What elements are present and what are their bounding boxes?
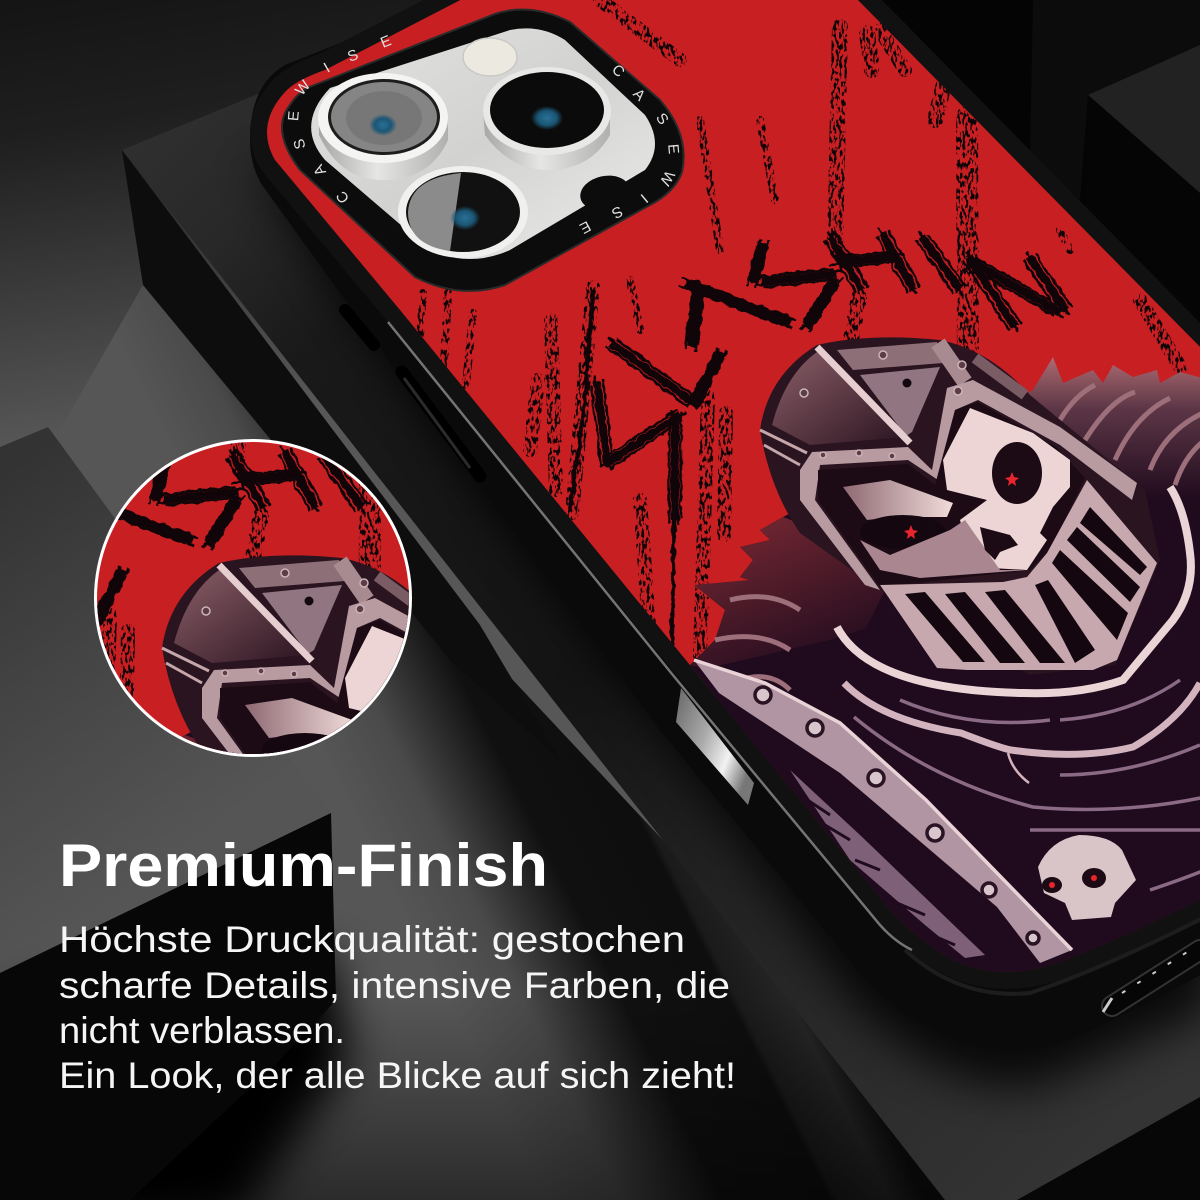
description text [59,919,736,1096]
description text: scharfe Details, intensive Farben, die [59,965,730,1006]
nose hole [980,527,1018,560]
knight illustration [690,337,1200,990]
right eye socket [992,442,1042,504]
speckled brush streaks [420,0,1180,655]
camera island [282,10,684,291]
left eye socket [860,515,946,549]
case brand lettering: E [285,110,303,122]
printed artwork [250,0,1200,990]
case brand lettering: I [321,60,333,76]
left lower block [0,427,350,1200]
case brand lettering: W [656,168,678,189]
feather stripes [800,795,955,945]
second cloak swoosh [844,683,1200,754]
crown strap [938,343,965,382]
case brand lettering: S [290,137,310,151]
case brand lettering: C [608,61,628,81]
camera glass [311,28,655,259]
case brand lettering: C [333,188,353,206]
lower side slot [402,372,480,476]
dome centre panel [860,367,940,436]
right eye spark [1005,472,1019,486]
chest strap [694,660,1072,963]
cloak crack [1008,753,1029,783]
case brand lettering: I [637,190,651,206]
helmet rivets [800,351,966,459]
case brand lettering: A [629,85,649,105]
fur strokes [715,385,1200,690]
rune scribble lines right [603,230,1072,517]
lower frame lip [905,917,1200,994]
rune underlay [597,233,1066,520]
left fur [690,517,900,700]
diagonal strap [817,347,910,443]
helmet dome [760,337,1160,675]
crown side [975,358,1025,395]
flash [463,38,517,76]
dome left panel [772,352,905,445]
visor frame [880,480,1157,670]
main cloak swoosh [837,487,1191,693]
case brand lettering: E [378,32,394,52]
case brand lettering: E [577,217,593,237]
zoom circle [0,208,612,1200]
visor grill slots [905,507,1147,663]
upper side slot [345,310,374,345]
lens top left [318,73,448,180]
feathered lower left [790,770,985,958]
case brand lettering: W [292,76,315,99]
description text: Höchste Druckqualität: gestochen [59,919,685,960]
frame ring [267,0,1200,972]
phone [250,0,1200,1050]
lens right [483,67,611,170]
cloak lower [718,628,1200,972]
case brand lettering: A [310,161,330,179]
skull face [943,408,1070,570]
rune scribble lines upper [600,238,1069,525]
description text: nicht verblassen. [59,1010,345,1051]
case brand lettering: S [652,110,672,128]
mic hole [577,171,633,215]
bottom port [1103,949,1200,1012]
left eye spark [904,525,918,539]
rune lettering [591,228,1072,525]
red base [250,0,1200,990]
phone cast shadow [250,160,1200,1087]
side silver button [676,688,754,805]
brow frame [800,380,1137,590]
strap rivets [755,687,1039,944]
strap edge [694,660,1072,950]
rune scribble lines left [591,236,1060,523]
rune scribble lines lower [594,228,1063,515]
cheek fur [860,520,1027,578]
small skull emblem [1038,835,1136,920]
helmet bolt hole [902,378,912,388]
solid streaks [570,290,675,650]
description text: Ein Look, der alle Blicke auf sich zieht! [59,1055,736,1096]
case brand lettering: S [609,202,625,222]
lens bottom [398,166,528,258]
fur and cloak mass [690,357,1200,990]
temple band [760,430,807,465]
dome top panel [837,342,943,370]
face cavity [818,402,1085,587]
case brand lettering: S [345,46,361,66]
cloak fold lines [854,680,1200,890]
phone body [250,0,1200,1050]
top right dark area and block [860,0,1200,360]
left brow fur [843,480,953,520]
frame gloss [388,322,912,950]
title: Premium-Finish [59,832,548,899]
case brand lettering [285,32,682,237]
case brand lettering: E [664,143,682,155]
island bezel [282,10,684,291]
